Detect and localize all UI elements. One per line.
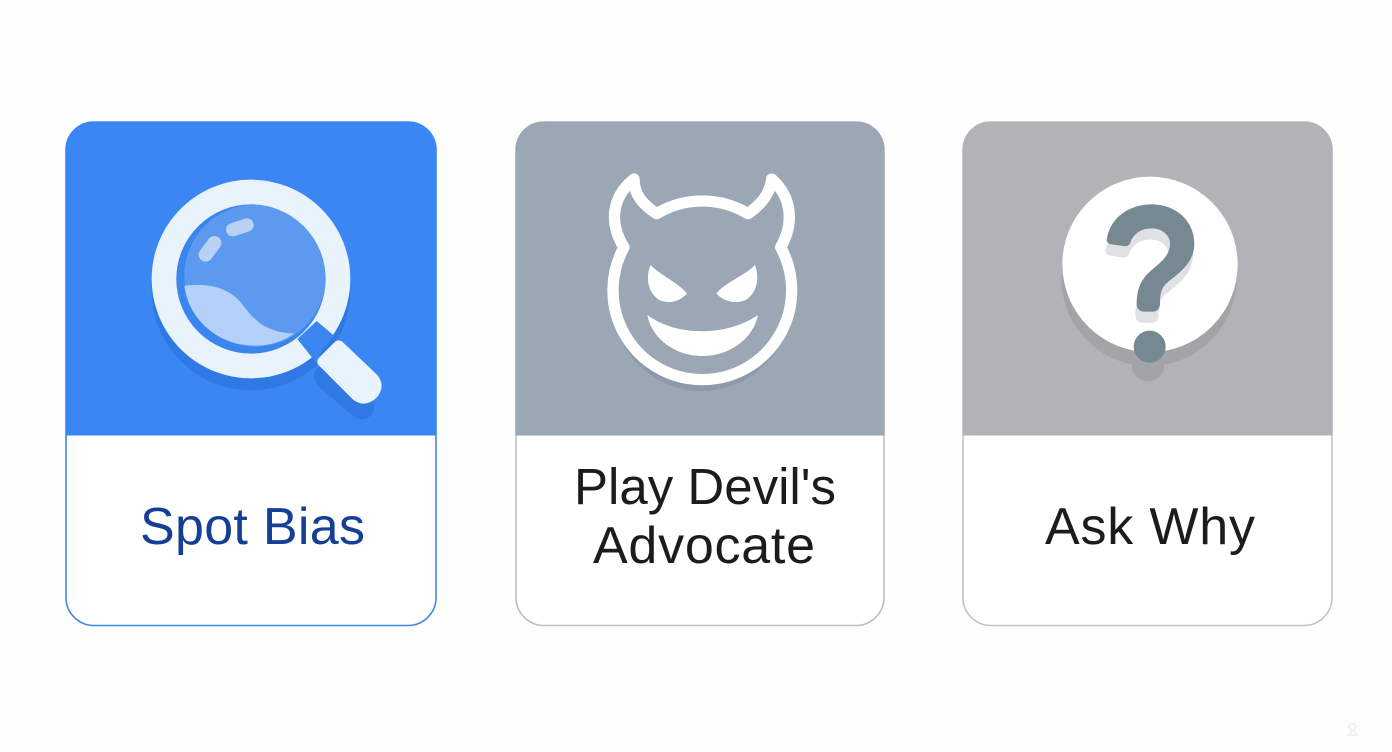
coloured header [65, 122, 437, 436]
right eye [716, 265, 757, 302]
face fill [613, 179, 792, 380]
label: Play Devil's: Play Devil's [574, 458, 836, 515]
icon: magnifying glass [164, 192, 376, 407]
grin [647, 315, 758, 356]
card outline [516, 122, 884, 626]
white disc [1062, 177, 1238, 352]
icon: question mark [1061, 177, 1238, 382]
icon shadow [164, 204, 362, 407]
left eye [648, 265, 687, 302]
mark shadow [1105, 216, 1193, 323]
label: Spot Bias: Spot Bias [140, 498, 365, 556]
lens reflection wave [184, 285, 294, 346]
coloured header [515, 122, 885, 436]
card outline [66, 122, 436, 626]
glint small [206, 243, 214, 255]
face outline [613, 179, 792, 380]
panel: Spot Bias card [65, 122, 437, 626]
glint large [233, 225, 247, 230]
question mark stroke [1107, 204, 1194, 312]
label: Ask Why: Ask Why [1045, 498, 1255, 556]
lens base [177, 204, 327, 354]
label: Advocate: Advocate [593, 517, 815, 575]
neck cut [297, 321, 334, 363]
card outline [963, 122, 1332, 626]
handle [323, 346, 376, 398]
circle shadow [1061, 191, 1237, 366]
dot shadow [1132, 350, 1164, 382]
panel: Ask Why card [962, 122, 1333, 626]
icon: devil face [612, 179, 792, 391]
coloured header [962, 122, 1333, 436]
lens ring [164, 192, 338, 366]
question mark dot [1134, 331, 1166, 363]
lens glass [184, 205, 326, 347]
watermark sparkle [1348, 724, 1357, 735]
panel: Play Devil's Advocate card [515, 122, 885, 626]
icon shadow [612, 190, 791, 391]
